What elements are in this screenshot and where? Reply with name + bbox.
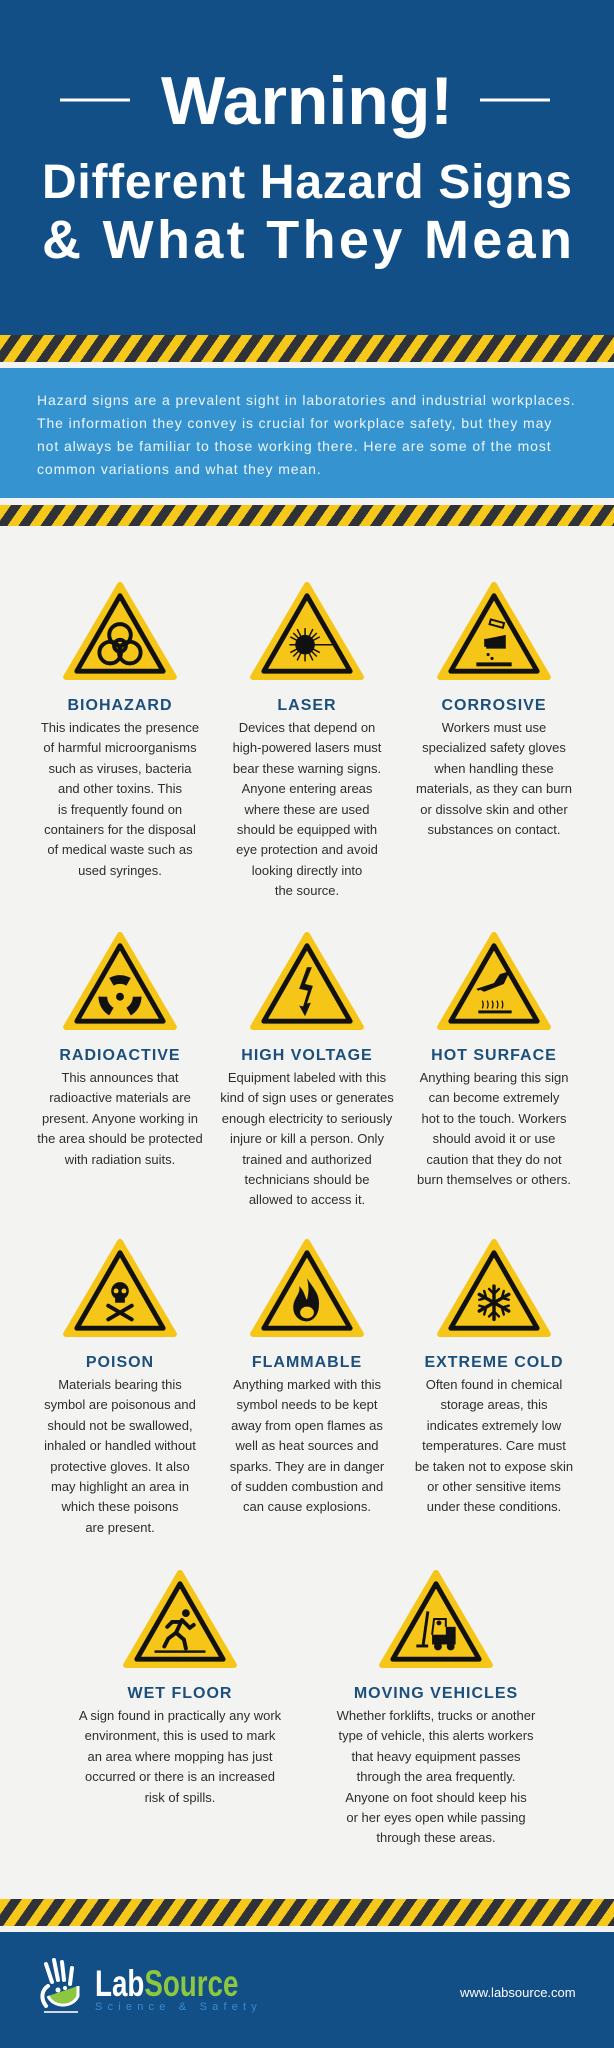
card: radioactive: with radiation suits. [65, 1152, 175, 1167]
card: biohazard: of harmful microorganisms [43, 740, 197, 755]
title [42, 63, 572, 270]
card: biohazard: and other toxins. This [58, 781, 182, 796]
card: biohazard: used syringes. [78, 863, 162, 878]
card: corrosive: or dissolve skin and other [420, 802, 568, 817]
card: extreme cold: indicates extremely low [427, 1418, 561, 1433]
card: biohazard: of medical waste such as [47, 842, 193, 857]
card: poison: protective gloves. It also [50, 1459, 190, 1474]
card: hot surface: caution that they do not [426, 1152, 562, 1167]
card: wet floor: an area where mopping has just [87, 1749, 272, 1764]
icon: radioactive sign [63, 932, 177, 1030]
card: extreme cold: or other sensitive items [427, 1479, 561, 1494]
card: biohazard [41, 582, 199, 878]
card: poison: are present. [85, 1520, 155, 1535]
card: radioactive [37, 932, 203, 1167]
card: biohazard: containers for the disposal [44, 822, 196, 837]
card: moving vehicles: MOVING VEHICLES [354, 1685, 518, 1702]
icon: corrosive sign [437, 582, 551, 680]
icon: poison sign [63, 1239, 177, 1337]
header panel [0, 0, 614, 335]
card: flammable: well as heat sources and [235, 1438, 379, 1453]
card: high voltage: technicians should be [244, 1172, 370, 1187]
card: flammable: away from open flames as [231, 1418, 383, 1433]
title: & What They Mean [42, 210, 572, 270]
card: flammable [230, 1239, 384, 1514]
card: corrosive: when handling these [434, 761, 554, 776]
card: extreme cold: storage areas, this [441, 1397, 547, 1412]
card: moving vehicles: Anyone on foot should keep his [345, 1790, 527, 1805]
card: wet floor: environment, this is used to mark [85, 1728, 275, 1743]
card: laser [233, 582, 382, 898]
card: wet floor: WET FLOOR [128, 1685, 232, 1702]
card: extreme cold: temperatures. Care must [422, 1438, 566, 1453]
icon: flammable sign [250, 1239, 364, 1337]
card: hot surface: can become extremely [429, 1090, 559, 1105]
card: radioactive: radioactive materials are [49, 1090, 191, 1105]
card: wet floor [78, 1570, 282, 1805]
card: laser: bear these warning signs. [233, 761, 381, 776]
card: laser: Anyone entering areas [242, 781, 372, 796]
card: extreme cold: under these conditions. [427, 1499, 561, 1514]
card: high voltage: allowed to access it. [249, 1192, 365, 1207]
card: corrosive: materials, as they can burn [416, 781, 572, 796]
card: extreme cold: Often found in chemical [426, 1377, 562, 1392]
card: flammable: can cause explosions. [243, 1499, 371, 1514]
card: poison: which these poisons [61, 1499, 179, 1514]
card: high voltage: trained and authorized [242, 1152, 372, 1167]
intro text panel [0, 368, 614, 498]
card: moving vehicles: type of vehicle, this alerts workers [338, 1728, 534, 1743]
card: corrosive: CORROSIVE [441, 697, 546, 714]
card: moving vehicles: or her eyes open while passing [346, 1810, 526, 1825]
website url: www.labsource.com [460, 1985, 576, 2000]
footer panel [0, 1932, 614, 2048]
card: high voltage: kind of sign uses or generates [220, 1090, 394, 1105]
card: hot surface [417, 932, 571, 1187]
card: radioactive: RADIOACTIVE [59, 1047, 181, 1064]
icon: hot surface sign [437, 932, 551, 1030]
card: wet floor: risk of spills. [145, 1790, 215, 1805]
card: extreme cold: EXTREME COLD [424, 1354, 564, 1371]
card: biohazard: is frequently found on [58, 802, 182, 817]
card: hot surface: HOT SURFACE [431, 1047, 557, 1064]
icon: snowflake sign [437, 1239, 551, 1337]
card: flammable: of sudden combustion and [231, 1479, 383, 1494]
intro text panel: The information they convey is crucial for workplace safety, but they may [37, 415, 552, 431]
card: high voltage: HIGH VOLTAGE [241, 1047, 373, 1064]
card: flammable: Anything marked with this [233, 1377, 381, 1392]
icon: high voltage sign [250, 932, 364, 1030]
card: flammable: symbol needs to be kept [237, 1397, 377, 1412]
card: radioactive: This announces that [61, 1070, 179, 1085]
card: poison: may highlight an area in [51, 1479, 189, 1494]
icon: forklift sign [379, 1570, 493, 1668]
title: Different Hazard Signs [42, 156, 572, 209]
icon: wet floor sign [123, 1570, 237, 1668]
card: poison [44, 1239, 196, 1535]
card: laser: where these are used [244, 802, 370, 817]
card: corrosive: Workers must use [442, 720, 546, 735]
card: corrosive: substances on contact. [428, 822, 560, 837]
card: moving vehicles: through these areas. [376, 1830, 496, 1845]
card: poison: symbol are poisonous and [44, 1397, 196, 1412]
card: hot surface: burn themselves or others. [417, 1172, 571, 1187]
card: hot surface: Anything bearing this sign [420, 1070, 568, 1085]
card: laser: eye protection and avoid [236, 842, 378, 857]
card: biohazard: such as viruses, bacteria [48, 761, 192, 776]
intro text panel: Hazard signs are a prevalent sight in laboratories and industrial workplaces. [37, 392, 576, 408]
icon: biohazard sign [63, 582, 177, 680]
brand name: LabSource [95, 1963, 238, 2004]
icon: laser sign [250, 582, 364, 680]
logo: LabSource [40, 1958, 262, 2013]
card: wet floor: A sign found in practically any work [79, 1708, 281, 1723]
tagline: Science & Safety [95, 2001, 262, 2013]
card: high voltage [220, 932, 394, 1207]
card: poison: Materials bearing this [58, 1377, 182, 1392]
card: flammable: sparks. They are in danger [230, 1459, 384, 1474]
card: poison: should not be swallowed, [47, 1418, 193, 1433]
card: laser: the source. [275, 883, 339, 898]
card: radioactive: the area should be protected [37, 1131, 203, 1146]
card: flammable: FLAMMABLE [252, 1354, 362, 1371]
card: laser: high-powered lasers must [233, 740, 381, 755]
title: Warning! [161, 63, 453, 139]
card: extreme cold: be taken not to expose skin [415, 1459, 573, 1474]
icon: hand with flask [40, 1958, 80, 2013]
card: poison: inhaled or handled without [44, 1438, 196, 1453]
card: corrosive [416, 582, 572, 837]
card: biohazard: This indicates the presence [41, 720, 199, 735]
intro text panel: common variations and what they mean. [37, 461, 322, 477]
card: high voltage: enough electricity to seriously [222, 1111, 392, 1126]
card: wet floor: occurred or there is an increased [85, 1769, 275, 1784]
card: high voltage: injure or kill a person. Only [230, 1131, 384, 1146]
card: high voltage: Equipment labeled with this [228, 1070, 386, 1085]
card: moving vehicles: Whether forklifts, trucks or another [337, 1708, 535, 1723]
card: moving vehicles: through the area frequently. [357, 1769, 515, 1784]
card: extreme cold [415, 1239, 573, 1514]
card: corrosive: specialized safety gloves [422, 740, 566, 755]
card: moving vehicles: that heavy equipment passes [351, 1749, 521, 1764]
card: moving vehicles [336, 1570, 536, 1845]
card: hot surface: hot to the touch. Workers [422, 1111, 566, 1126]
card: laser: looking directly into [252, 863, 362, 878]
intro text panel: not always be familiar to those working there. Here are some of the most [37, 438, 552, 454]
card: radioactive: present. Anyone working in [42, 1111, 198, 1126]
card: laser: LASER [277, 697, 337, 714]
card: hot surface: should avoid it or use [433, 1131, 555, 1146]
card: laser: should be equipped with [237, 822, 377, 837]
card: biohazard: BIOHAZARD [68, 697, 172, 714]
card: laser: Devices that depend on [239, 720, 375, 735]
card: poison: POISON [86, 1354, 154, 1371]
